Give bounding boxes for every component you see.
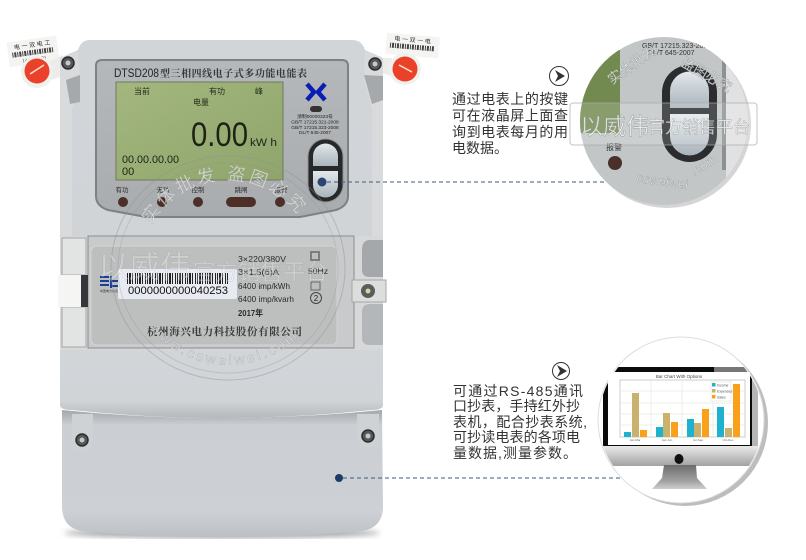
ear notches xyxy=(66,75,80,104)
monitor stand xyxy=(652,465,707,489)
magnified button circle: 实体批发 xyxy=(605,42,660,87)
indicator lights: 无功 xyxy=(156,186,170,194)
LCD screen: 00.00.00.00 xyxy=(122,154,179,166)
screws xyxy=(62,57,381,446)
text block: button description: 通过电表上的按键 xyxy=(452,91,568,107)
bar chart: Oct-Dec xyxy=(722,438,734,442)
display panel xyxy=(96,60,348,217)
LCD screen: kW h xyxy=(250,137,277,149)
ratings: 50Hz xyxy=(308,266,328,276)
magnified button circle: GB/T 17215.323-2008 xyxy=(642,43,711,50)
LCD screen: 电量 xyxy=(193,97,209,107)
rating symbols xyxy=(311,252,319,260)
monitor bezel xyxy=(603,367,752,447)
lower cover xyxy=(62,410,383,538)
watermark stamp: www.csweiwei.com xyxy=(151,324,297,366)
bar chart: Jul-Sep xyxy=(693,438,703,442)
seal label: 电 一 双 一 电 xyxy=(394,34,431,46)
push button xyxy=(308,139,343,202)
nameplate cover: 2 xyxy=(314,294,319,303)
text block: RS-485 description: 可抄读电表的各项电 xyxy=(453,429,580,445)
certification text: 浙制00000323号 xyxy=(297,113,333,120)
chart legend: Sales xyxy=(717,396,726,400)
indicator lights: 报警 xyxy=(274,185,288,194)
text block: button description: 电数据。 xyxy=(452,140,508,156)
barcode xyxy=(118,269,237,299)
top arrow icon xyxy=(550,66,568,86)
magnified button circle xyxy=(580,36,751,208)
connector dot: cover xyxy=(335,474,343,482)
seal cap xyxy=(389,53,421,85)
ratings xyxy=(238,254,328,318)
certification text: GB/T 17215.323-2008 xyxy=(291,125,339,131)
chart legend: Expenses xyxy=(717,390,733,394)
apple logo xyxy=(674,454,684,464)
bar chart: Apr-Jun xyxy=(662,438,673,442)
text block: RS-485 description xyxy=(453,383,587,461)
watermark badge xyxy=(570,103,757,145)
chart legend: Income xyxy=(717,384,729,388)
model title: DTSD208 xyxy=(114,68,159,80)
slider clips xyxy=(62,238,86,275)
text block: button description: 询到电表每月的用 xyxy=(452,124,568,140)
text block: RS-485 description: 表机，配合抄表系统, xyxy=(453,414,587,430)
indicator lights xyxy=(116,185,288,207)
magnified button circle: 报警 xyxy=(606,142,622,152)
nameplate cover xyxy=(58,236,383,350)
text block: RS-485 description: 可通过RS-485通讯 xyxy=(453,383,583,399)
left seal xyxy=(7,35,70,88)
seal arm xyxy=(372,58,392,76)
nameplate logo xyxy=(100,276,119,288)
lower housing xyxy=(60,350,383,418)
body side shading xyxy=(60,50,80,350)
ratings: 2017年 xyxy=(238,308,263,318)
LCD screen: 00 xyxy=(122,166,134,178)
ratings: 3×1.5(6)A xyxy=(238,267,279,277)
right seal xyxy=(372,33,440,85)
ratings: 6400 imp/kWh xyxy=(238,281,290,291)
watermark badge: 以威伟 xyxy=(580,113,649,139)
magnified button circle: DL/T 645-2007 xyxy=(648,50,695,57)
seal cap xyxy=(21,56,53,88)
meter body xyxy=(60,40,383,350)
certification text xyxy=(291,106,339,136)
watermark brand xyxy=(98,250,328,285)
logo xyxy=(307,84,325,100)
manufacturer: 杭州海兴电力科技股份有限公司 xyxy=(147,325,302,338)
electricity meter xyxy=(58,40,386,538)
watermark brand: 以威伟 xyxy=(98,250,191,285)
seal label: 14 0016279 xyxy=(22,55,47,63)
right recess xyxy=(362,240,383,277)
watermark stamp: 实体批发 盗图必究 xyxy=(141,165,306,224)
bottom arrow icon xyxy=(552,362,570,380)
nameplate cover: 0000000000040253 xyxy=(128,285,228,297)
text block: button description xyxy=(452,91,568,156)
bottom shadow xyxy=(64,528,380,538)
bar chart: Jan-Mar xyxy=(629,438,641,442)
watermark brand: 官方销售平台 xyxy=(193,260,328,285)
LCD screen: 峰 xyxy=(255,86,263,96)
certification text: DL/T 645-2007 xyxy=(299,130,331,136)
watermark badge: 官方销售平台 xyxy=(648,118,750,137)
LCD screen: 有功 xyxy=(209,86,225,96)
text block: RS-485 description: 量数据,测量参数。 xyxy=(453,445,577,461)
white tape xyxy=(58,275,81,307)
reading: 0.00 xyxy=(191,116,248,154)
seal label: 电 一 双 电 工 xyxy=(13,38,51,51)
magnified button circle: csweiwei xyxy=(636,170,689,192)
indicator lights: 有功 xyxy=(116,185,129,194)
text block: RS-485 description: 口抄表，手持红外抄 xyxy=(453,398,580,414)
ratings: 3×220/380V xyxy=(238,254,286,264)
connector dot: button xyxy=(318,178,326,186)
certification text: GB/T 17215.321-2008 xyxy=(291,120,339,126)
seal label xyxy=(7,35,60,67)
mounting tabs xyxy=(72,414,93,451)
enlarged button xyxy=(662,65,717,162)
monitor chin xyxy=(600,446,758,466)
chart legend xyxy=(711,382,733,401)
nameplate cover: 中国电力仪表 xyxy=(100,288,118,293)
seal arm xyxy=(48,55,70,80)
magnified monitor circle xyxy=(598,337,768,506)
LCD screen: 当前 xyxy=(134,86,150,96)
LCD screen xyxy=(116,82,283,180)
indicator lights: 跳闸 xyxy=(234,185,248,194)
connector line: button xyxy=(327,181,608,183)
connector line: cover xyxy=(343,477,623,479)
terminal screw xyxy=(352,280,386,302)
magnified button circle: 盗图必究 xyxy=(678,54,735,96)
watermark stamp xyxy=(110,156,346,380)
bar chart: Bar Chart With Options xyxy=(656,374,703,379)
model title: 型三相四线电子式多功能电能表 xyxy=(160,67,307,80)
text block: button description: 可在液晶屏上面查 xyxy=(452,108,568,124)
magnified button circle: .com xyxy=(688,151,719,179)
bar chart xyxy=(608,372,750,445)
model title xyxy=(114,67,307,80)
indicator lights: 控制 xyxy=(192,185,205,194)
ratings: 6400 imp/kvarh xyxy=(238,294,294,304)
